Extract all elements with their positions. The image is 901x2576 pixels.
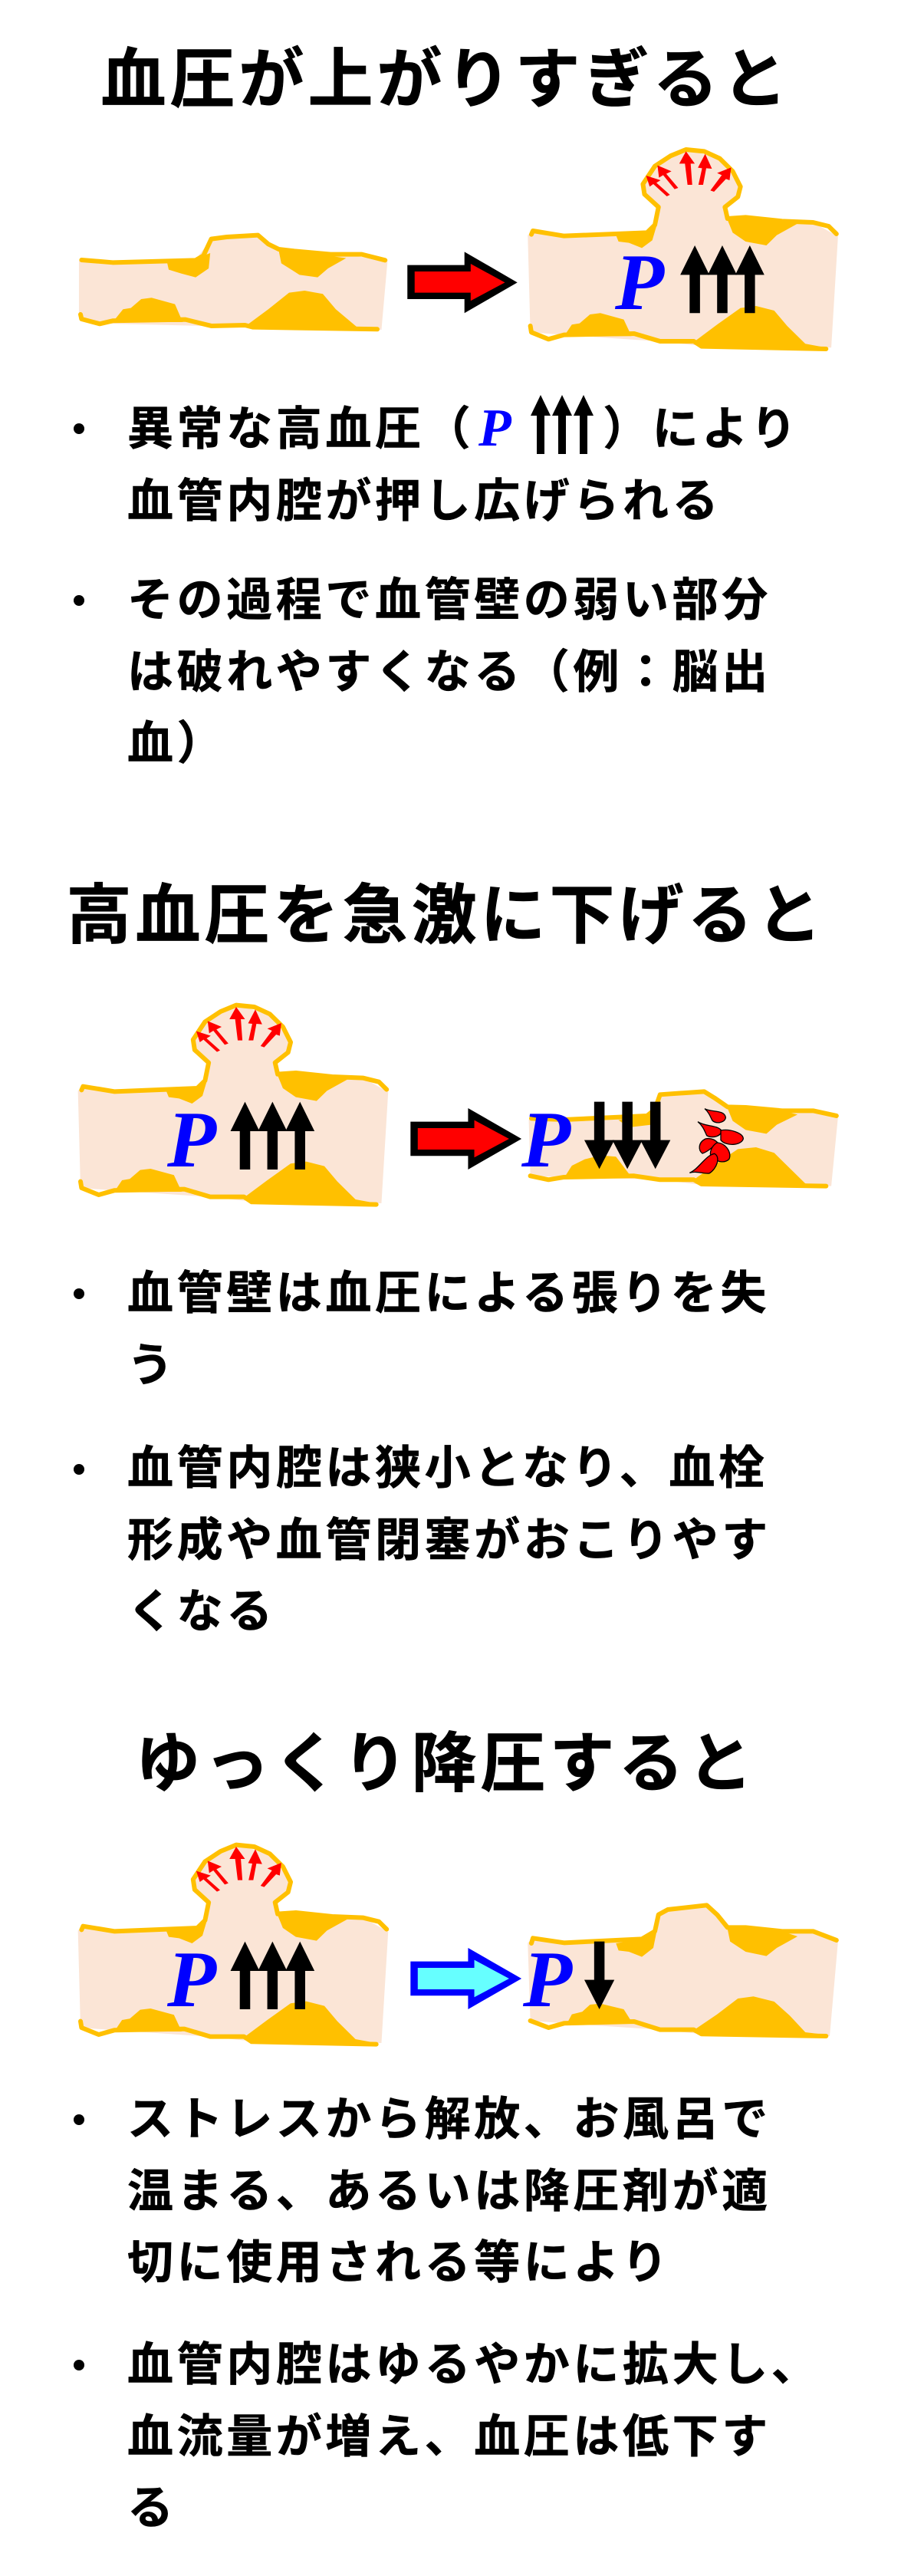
text block: bullet 2: る — [127, 2482, 177, 2534]
text block: bullet 1: う — [127, 1339, 177, 1391]
vessel: relaxed — [528, 1905, 838, 2036]
text block: bullet 2 — [127, 574, 771, 769]
text block: bullet 2 — [127, 2339, 820, 2534]
arrows: three black down arrows — [584, 1102, 670, 1169]
diagram: bulging vessel to narrowed vessel with thrombus — [78, 1003, 839, 1207]
text block: bullet 2: 血） — [127, 718, 226, 769]
title: section 2 heading: 高血圧を急激に下げると — [66, 880, 825, 952]
bullet dot — [74, 423, 84, 434]
icon: thrombus red blood clots — [689, 1109, 743, 1173]
text block: bullet 2: は破れやすくなる（例：脳出 — [127, 646, 771, 698]
arrow: red block arrow — [407, 252, 518, 313]
label: pressure P left: P — [166, 1094, 217, 1184]
text block: bullet 1: 切に使用される等により — [127, 2237, 671, 2288]
inline icon: P with three up arrows: P — [478, 399, 512, 458]
text block: bullet 1 — [127, 1268, 770, 1391]
bullet dot — [74, 595, 84, 606]
text block: bullet 2: 血管内腔は狭小となり、血栓 — [127, 1443, 768, 1494]
arrow: red block arrow — [410, 1108, 521, 1170]
text block: bullet 1 — [127, 2094, 771, 2288]
text block: bullet 1: 異常な高血圧（ ）により — [127, 403, 800, 455]
arrows: three black up arrows — [680, 245, 765, 313]
text block: bullet 1 — [127, 403, 800, 526]
vessel: bulging with red arrows — [528, 150, 838, 349]
vessel: bulging with red arrows — [78, 1845, 388, 2045]
label: pressure P right: P — [522, 1934, 573, 2024]
vessel: normal — [79, 235, 388, 330]
text block: bullet 2: 血管内腔はゆるやかに拡大し、 — [127, 2339, 820, 2390]
text block: bullet 2: その過程で血管壁の弱い部分 — [127, 574, 771, 626]
arrow: blue and cyan block arrow — [410, 1948, 521, 2009]
vessel: bulging with red arrows — [78, 1005, 388, 1205]
bullet dot — [74, 1288, 84, 1299]
text block: bullet 1: ストレスから解放、お風呂で — [127, 2094, 771, 2145]
text block: bullet 2 — [127, 1443, 771, 1637]
text block: bullet 1: 血管内腔が押し広げられる — [127, 475, 722, 526]
label: pressure P left: P — [166, 1934, 217, 2024]
title: section 3 heading: ゆっくり降圧すると — [135, 1728, 756, 1801]
inline icon: P with three up arrows — [478, 395, 594, 458]
arrow: black down arrow — [584, 1942, 614, 2009]
text block: bullet 1: 温まる、あるいは降圧剤が適 — [127, 2166, 771, 2216]
diagram: bulging vessel to relaxed vessel — [78, 1842, 839, 2047]
diagram: normal vessel to bulging vessel — [78, 147, 839, 351]
vessel: narrowed — [529, 1091, 838, 1186]
text block: bullet 1: 血管壁は血圧による張りを失 — [127, 1268, 770, 1319]
bullet dot — [74, 2114, 84, 2125]
bullet dot — [74, 2360, 84, 2370]
text block: bullet 2: 形成や血管閉塞がおこりやす — [127, 1514, 771, 1566]
label: pressure P right: P — [521, 1094, 571, 1184]
label: pressure P: P — [614, 237, 665, 327]
text block: bullet 2: 血流量が増え、血圧は低下す — [127, 2411, 771, 2462]
bullet dot — [74, 1464, 84, 1475]
arrows: three black up arrows — [231, 1942, 314, 2009]
arrows: three black up arrows — [231, 1102, 314, 1170]
text block: bullet 2: くなる — [127, 1586, 276, 1637]
title: section 1 heading: 血圧が上がりすぎると — [100, 44, 791, 117]
